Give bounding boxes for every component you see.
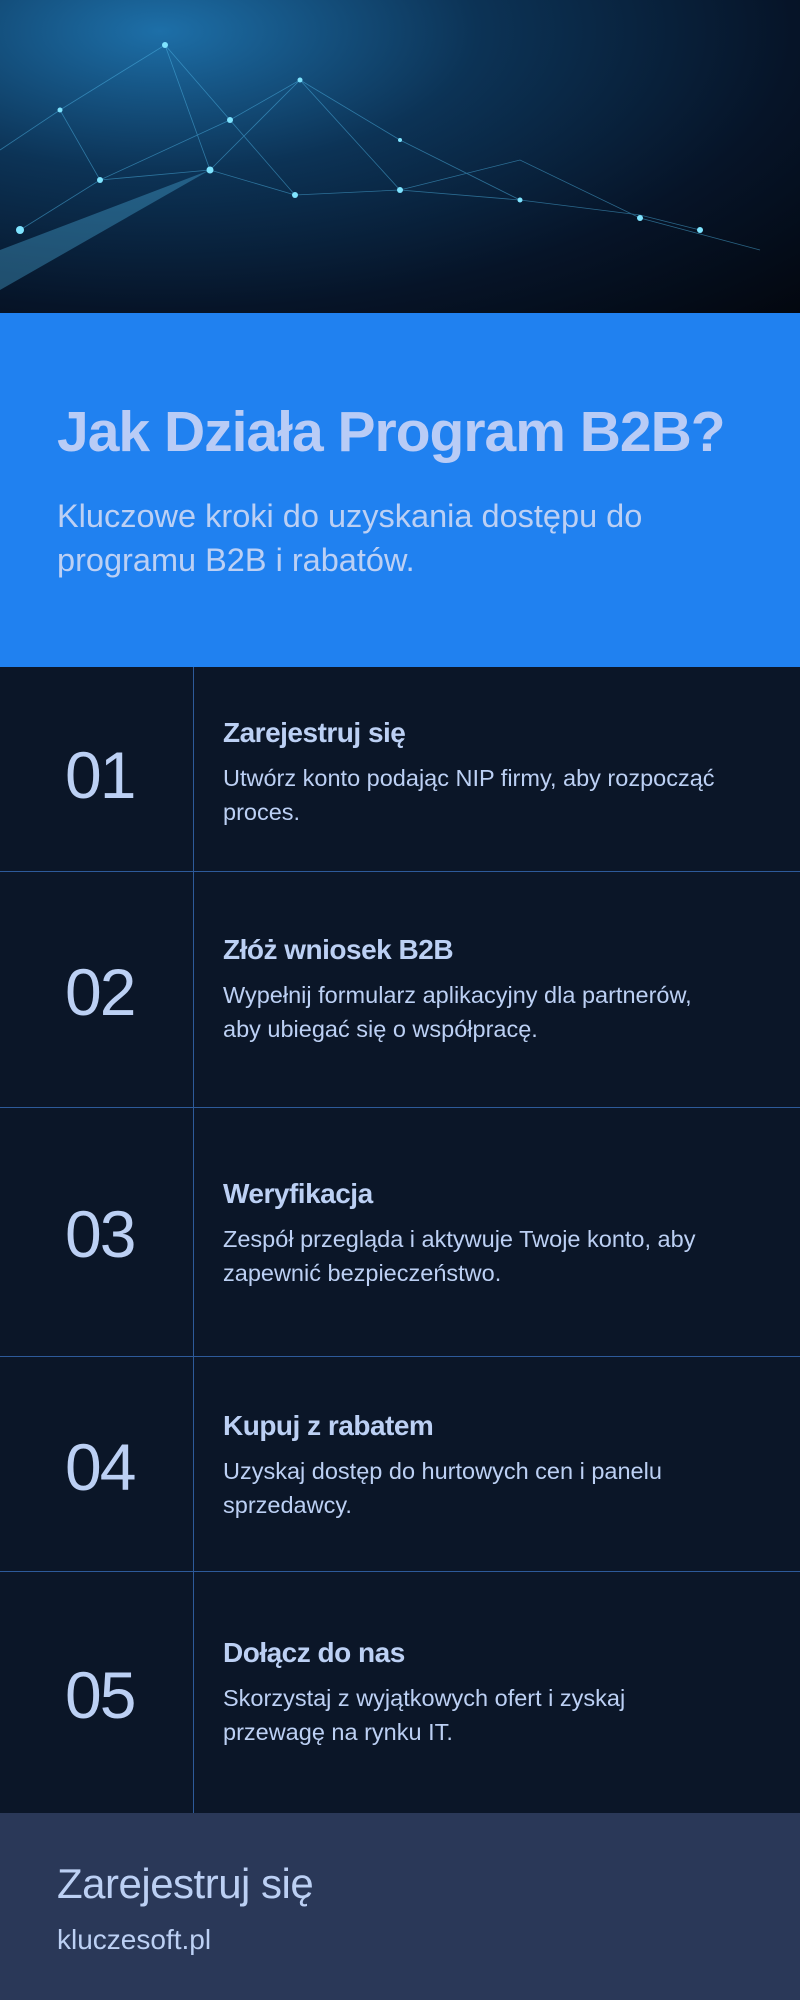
step 05: Dołącz do nas <box>223 1637 405 1668</box>
step 01 <box>0 667 800 872</box>
step 05 <box>65 1572 625 1813</box>
step 05: Skorzystaj z wyjątkowych ofert i zyskaj przewagę na rynku IT. <box>223 1685 625 1745</box>
step 04: Uzyskaj dostęp do hurtowych cen i panelu sprzedawcy. <box>223 1458 662 1518</box>
step 03: 03 <box>65 1197 134 1271</box>
step 03: Zespół przegląda i aktywuje Twoje konto, aby zapewnić bezpieczeństwo. <box>223 1226 695 1286</box>
panel: header <box>0 313 800 667</box>
step 01: Utwórz konto podając NIP firmy, aby rozpocząć proces. <box>223 765 715 825</box>
step 02: Złóż wniosek B2B <box>223 934 453 965</box>
step 02 <box>0 872 800 1108</box>
step 04 <box>0 1357 800 1572</box>
step 01: Zarejestruj się <box>223 717 405 748</box>
step 01: 01 <box>65 738 134 812</box>
hero: network image <box>0 0 800 313</box>
step 02: 02 <box>65 955 134 1029</box>
step 04: Kupuj z rabatem <box>223 1410 433 1441</box>
step 02: Wypełnij formularz aplikacyjny dla partnerów, aby ubiegać się o współpracę. <box>223 982 692 1042</box>
step 05: 05 <box>65 1658 134 1732</box>
footer <box>0 1813 800 2000</box>
footer cta: Zarejestruj się <box>57 1860 313 1907</box>
step 03: Weryfikacja <box>223 1178 373 1209</box>
title: Jak Działa Program B2B? <box>57 400 725 464</box>
subtitle: Kluczowe kroki do uzyskania dostępu do programu B2B i rabatów. <box>57 498 642 578</box>
footer url: kluczesoft.pl <box>57 1924 211 1955</box>
step 03 <box>0 1108 800 1357</box>
step 04: 04 <box>65 1430 134 1504</box>
